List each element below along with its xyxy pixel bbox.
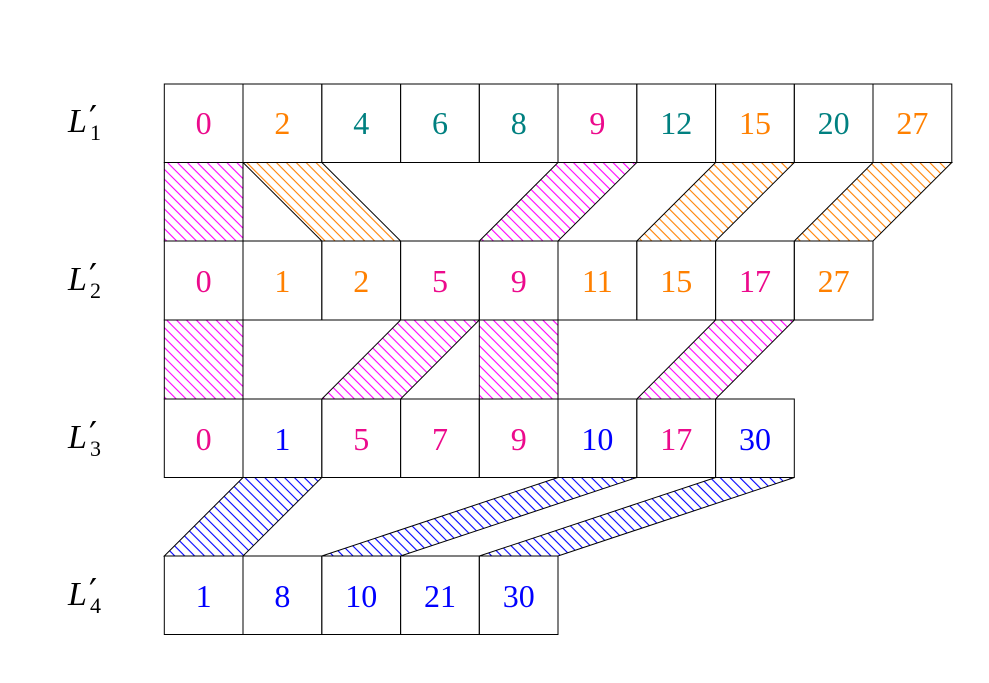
cells L'2: 1 <box>274 263 290 299</box>
label L'3: 3 <box>90 436 101 461</box>
cells L'1: 27 <box>896 105 928 141</box>
label L'2: 2 <box>90 278 101 303</box>
cells L'2: 11 <box>582 263 613 299</box>
label L'2: ′ <box>89 257 97 298</box>
cells L'2: 27 <box>818 263 850 299</box>
cells L'1: 0 <box>196 105 212 141</box>
cells L'4: 30 <box>503 578 535 614</box>
cells L'1: 20 <box>818 105 850 141</box>
row L'1 <box>67 84 952 162</box>
row L'4 <box>67 556 558 634</box>
hatched links: L'1 to L'2 <box>164 162 952 241</box>
row L'3 <box>67 399 794 478</box>
cells L'2: 5 <box>432 263 448 299</box>
label L'1: L <box>67 103 87 140</box>
cells L'3: 0 <box>196 421 212 457</box>
cells L'3: 5 <box>353 421 369 457</box>
row L'2 <box>67 241 873 320</box>
cells L'3: 9 <box>511 421 527 457</box>
label L'3: ′ <box>89 415 97 456</box>
cells L'3: 17 <box>660 421 692 457</box>
label L'2: L <box>67 261 87 298</box>
cells L'3: 10 <box>581 421 613 457</box>
cells L'2 <box>164 241 873 320</box>
cells L'4 <box>164 556 558 634</box>
hatched links: L'2 to L'3 <box>164 320 794 399</box>
cells L'2: 17 <box>739 263 771 299</box>
cells L'1: 12 <box>660 105 692 141</box>
cells L'4: 10 <box>345 578 377 614</box>
label L'1: 1 <box>90 120 101 145</box>
cells L'3: 7 <box>432 421 448 457</box>
cells L'1 <box>164 84 952 162</box>
cells L'2: 15 <box>660 263 692 299</box>
cells L'4: 21 <box>424 578 456 614</box>
label L'4: L <box>67 576 87 613</box>
label L'1: ′ <box>89 99 97 140</box>
label L'4 <box>67 572 101 618</box>
label L'3 <box>67 415 101 461</box>
hatched links: L'3 to L'4 <box>164 478 794 556</box>
label L'2 <box>67 257 101 303</box>
cells L'2: 2 <box>353 263 369 299</box>
label L'4: 4 <box>90 593 101 618</box>
cells L'1: 8 <box>511 105 527 141</box>
cells L'2: 9 <box>511 263 527 299</box>
cells L'3: 1 <box>274 421 290 457</box>
label L'3: L <box>67 419 87 456</box>
label L'4: ′ <box>89 572 97 613</box>
cells L'1: 6 <box>432 105 448 141</box>
cells L'1: 4 <box>353 105 369 141</box>
cells L'3: 30 <box>739 421 771 457</box>
cells L'1: 15 <box>739 105 771 141</box>
cells L'4: 1 <box>196 578 212 614</box>
cells L'1: 2 <box>274 105 290 141</box>
cells L'3 <box>164 399 794 478</box>
cells L'2: 0 <box>196 263 212 299</box>
cells L'1: 9 <box>589 105 605 141</box>
cells L'4: 8 <box>274 578 290 614</box>
label L'1 <box>67 99 101 145</box>
